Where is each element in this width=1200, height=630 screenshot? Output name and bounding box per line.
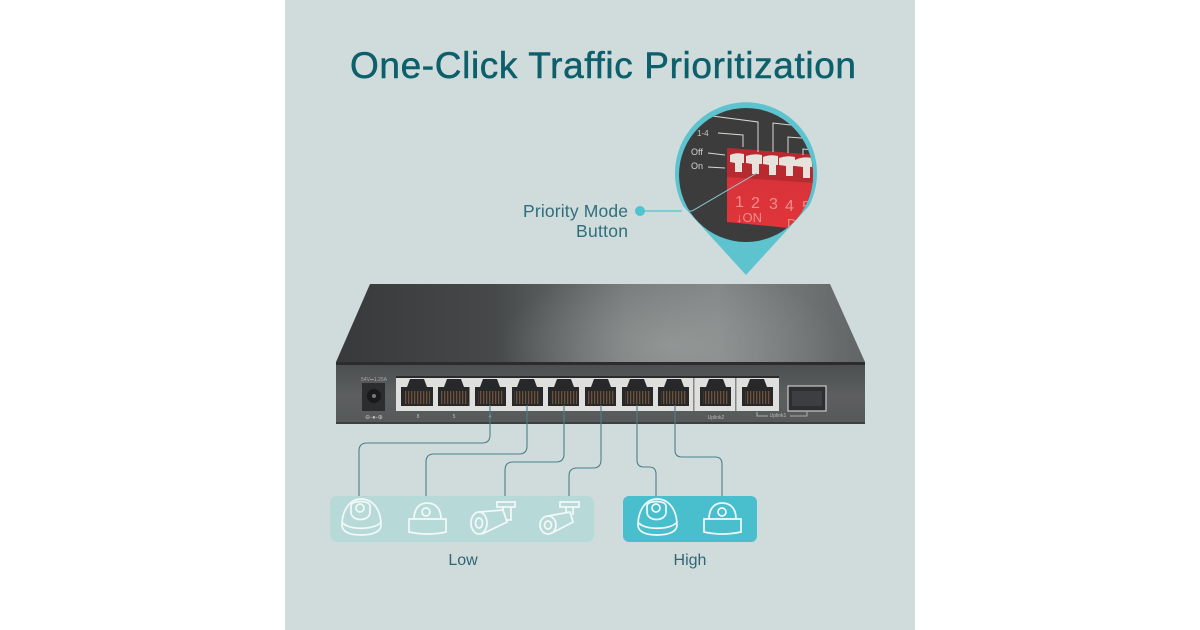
panel: low priority cameras bbox=[330, 496, 594, 542]
callout: magnifier lens: Off bbox=[691, 147, 703, 157]
callout: magnifier lens: 2 bbox=[751, 195, 760, 212]
switch front panel bbox=[336, 362, 865, 424]
callout: magnifier lens: 3 bbox=[769, 196, 778, 213]
callout label: Priority Mode Button: Priority Mode bbox=[523, 201, 628, 221]
callout: magnifier lens: 4 bbox=[785, 198, 794, 215]
panel: high priority cameras bbox=[623, 496, 757, 542]
title: One-Click Traffic Prioritization bbox=[350, 45, 856, 86]
port labels: 5 bbox=[453, 414, 456, 420]
connection lines: low priority bbox=[359, 405, 601, 496]
callout: magnifier lens: 5 bbox=[802, 199, 811, 216]
icon: bullet camera 1 bbox=[471, 502, 515, 534]
SFP slot bbox=[788, 386, 826, 411]
callout label: Priority Mode Button: Button bbox=[576, 221, 628, 241]
power socket: ⊖-●-⊕ bbox=[365, 415, 383, 421]
callout: magnifier lens: 1-4 bbox=[697, 129, 709, 138]
power socket bbox=[361, 377, 388, 421]
network switch bbox=[336, 284, 865, 424]
callout: magnifier lens: ↓ON bbox=[736, 210, 762, 225]
callout: magnifier lens: 1 bbox=[735, 194, 744, 211]
icon: bullet camera 2 bbox=[540, 502, 579, 534]
icon: dome camera 4 bbox=[704, 503, 741, 534]
callout: magnifier lens bbox=[675, 102, 830, 275]
port labels: Uplink2 bbox=[708, 415, 725, 421]
switch top face bbox=[336, 284, 865, 362]
icon: dome camera 2 bbox=[409, 503, 446, 534]
connection lines: high priority bbox=[637, 405, 722, 496]
panel: background bbox=[285, 0, 915, 630]
port labels: Uplink1 bbox=[770, 413, 787, 419]
icon: dome camera 3 bbox=[638, 499, 677, 535]
port labels: 8 bbox=[417, 414, 420, 420]
icon: dome camera 1 bbox=[342, 499, 381, 535]
port labels: 4 bbox=[489, 414, 492, 420]
port block bbox=[396, 378, 779, 411]
label: Low: Low bbox=[448, 552, 478, 569]
label: High: High bbox=[674, 552, 706, 569]
power socket: 54V⎓1.25A bbox=[361, 377, 388, 383]
callout label: Priority Mode Button bbox=[523, 201, 682, 241]
callout: magnifier lens: D bbox=[787, 216, 796, 231]
port labels bbox=[417, 412, 807, 421]
callout: magnifier lens: On bbox=[691, 161, 703, 171]
